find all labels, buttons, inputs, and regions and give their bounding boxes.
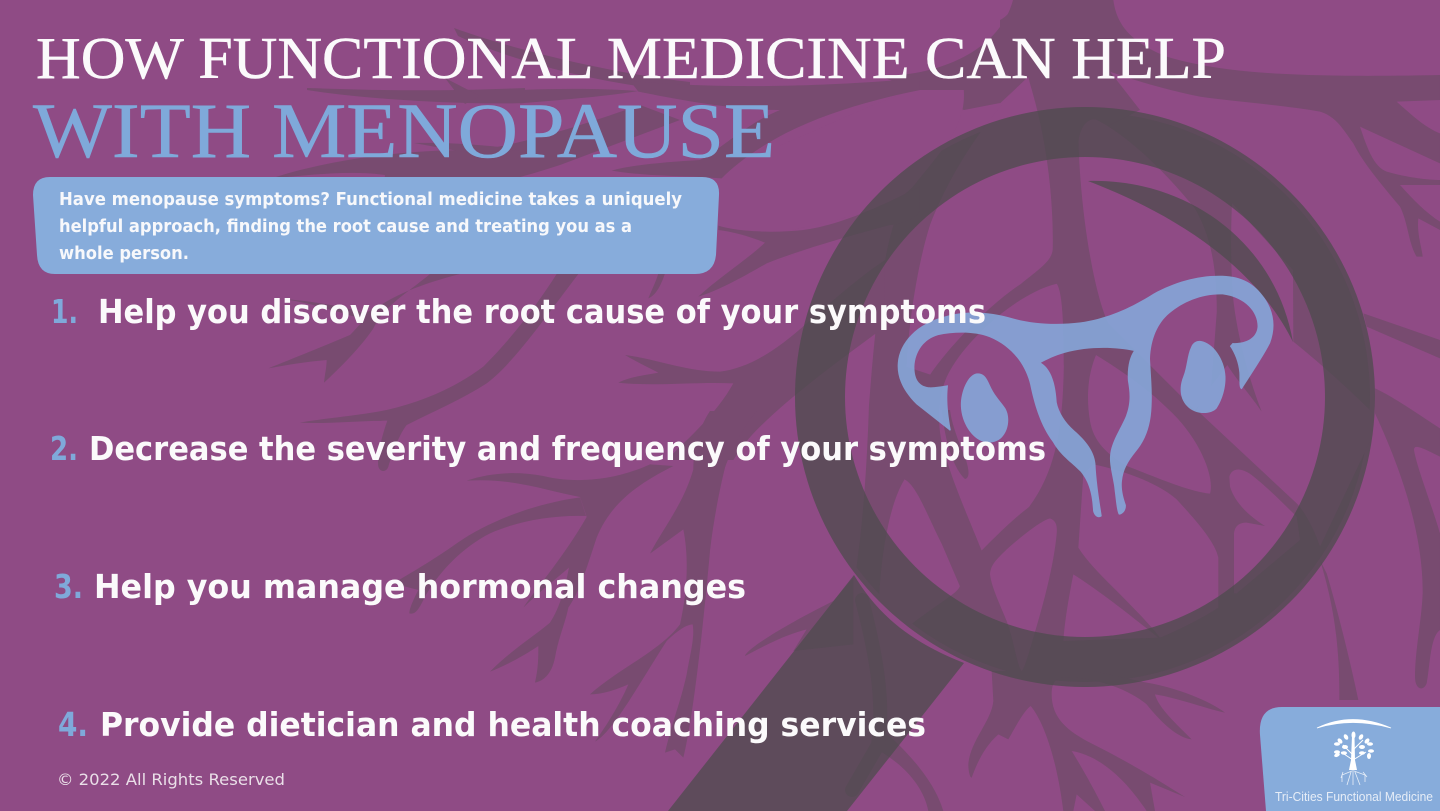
title line 1: HOW FUNCTIONAL MEDICINE CAN HELP (36, 25, 1226, 91)
magnifier ring (795, 107, 1375, 687)
list item 2: 2. (50, 430, 78, 468)
intro text: Have menopause symptoms? Functional medicine takes a uniquely (59, 190, 683, 210)
logo panel (1260, 707, 1440, 811)
right stems (1320, 313, 1440, 700)
lower stems (873, 671, 1225, 811)
intro panel (33, 177, 719, 274)
intro text: helpful approach, finding the root cause and treating you as a (59, 217, 632, 237)
list item 3: Help you manage hormonal changes (94, 568, 746, 606)
magnifier handle (668, 575, 964, 811)
logo background (1260, 707, 1440, 811)
intro text: whole person. (59, 244, 189, 264)
magnifying glass (668, 107, 1375, 811)
logo arc (1317, 720, 1391, 728)
twig inside lens (942, 410, 968, 479)
lens highlight (1088, 181, 1293, 342)
central-left trunk (467, 411, 853, 758)
upper tips behind the title (454, 28, 690, 92)
list item 4: 4. (58, 706, 88, 744)
list item 4: Provide dietician and health coaching services (100, 706, 926, 744)
title line 2: WITH MENOPAUSE (33, 87, 775, 174)
intro text (59, 190, 683, 264)
list item 3: 3. (54, 568, 83, 606)
list item 1: 1. (51, 293, 78, 331)
lens cells (780, 77, 1380, 671)
copyright: © 2022 All Rights Reserved (57, 770, 285, 789)
intro pill background (33, 177, 719, 274)
upper limbs (520, 78, 920, 460)
icon: uterus (898, 276, 1274, 517)
icon: tree logo (1334, 732, 1374, 785)
list item 1: Help you discover the root cause of your symptoms (98, 293, 986, 331)
left limbs (268, 274, 586, 614)
list item 2: Decrease the severity and frequency of your symptoms (89, 430, 1046, 468)
